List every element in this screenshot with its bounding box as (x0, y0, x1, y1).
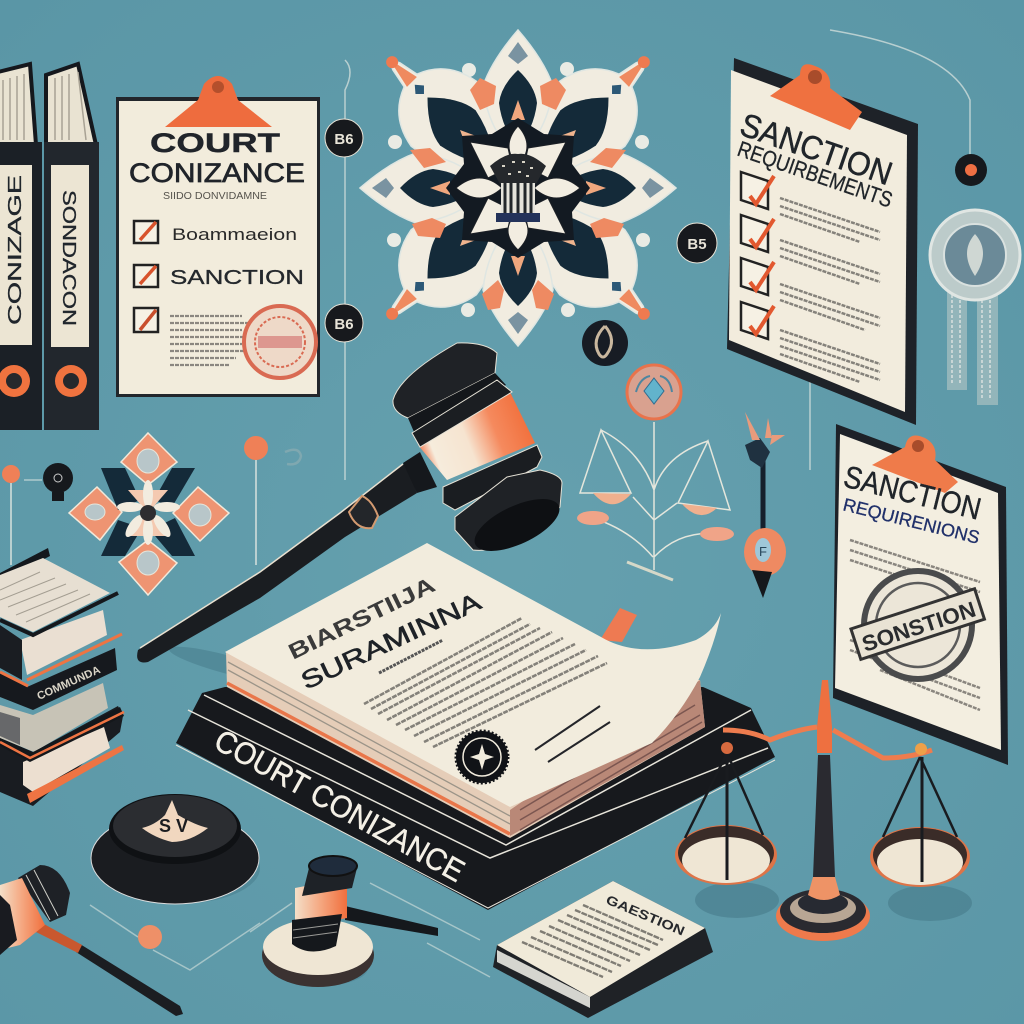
clipboard: sanction requirements top (727, 58, 918, 425)
left indicators: dots and stems (2, 436, 301, 565)
black stamp pad (91, 794, 260, 904)
clipboard: court conizance: SIIDO DONVIDAMNE (163, 191, 267, 202)
clipboard: court conizance: COURT (150, 128, 281, 158)
clipboard: sanction requirements lower: SANCTION (840, 459, 985, 527)
number badges: B5 (687, 236, 707, 253)
small emblem under flower (582, 320, 628, 366)
clipboard: court conizance: CONIZANCE (129, 158, 305, 188)
small gavel on block (262, 856, 438, 987)
clipboard: sanction requirements top: SANCTION (736, 106, 897, 192)
clipboard: court conizance: SANCTION (170, 267, 304, 289)
black stamp pad: V (176, 816, 188, 836)
clipboard: sanction requirements lower: SONSTION (859, 597, 979, 657)
clipboard: sanction requirements lower (833, 424, 1008, 765)
number badges: B6 (334, 316, 354, 333)
number badges: B6 (334, 131, 354, 148)
pen ornament (744, 412, 786, 598)
clipboard: court conizance (116, 76, 320, 397)
book title: COURT CONIZANCE (209, 723, 470, 889)
central flower emblem (355, 25, 681, 351)
small book bottom: GAESTION (604, 892, 687, 939)
mini scale plant (577, 422, 734, 580)
balance scale (675, 680, 972, 941)
central document on book (176, 543, 775, 910)
small connector dot (138, 925, 162, 949)
clipboard: sanction requirements top: REQUIRBEMENTS (734, 136, 896, 212)
big gavel (137, 343, 567, 688)
small orange medallion (627, 365, 681, 419)
binder spine label right: SONDACON (59, 190, 79, 326)
left flower diamonds (69, 433, 229, 595)
clipboard: court conizance: Boammaeion (172, 225, 297, 244)
seal with ribbons (930, 210, 1020, 405)
small book bottom (493, 881, 713, 1018)
dark dot connector (955, 154, 987, 186)
pen ornament: F (759, 544, 767, 559)
black stamp pad: S (159, 816, 171, 836)
bottom left gavel (0, 865, 183, 1016)
book stack left: COMMUNDA (35, 664, 102, 703)
number badges (325, 119, 717, 342)
clipboard: sanction requirements lower: REQUIRENIONS (841, 494, 982, 548)
document title: BIARSTIIJA (284, 572, 439, 664)
book stack left (0, 548, 124, 806)
binder spine label left: CONIZAGE (5, 175, 25, 325)
binders top left (0, 64, 99, 430)
central document on book: SURAMINNA (297, 587, 486, 695)
